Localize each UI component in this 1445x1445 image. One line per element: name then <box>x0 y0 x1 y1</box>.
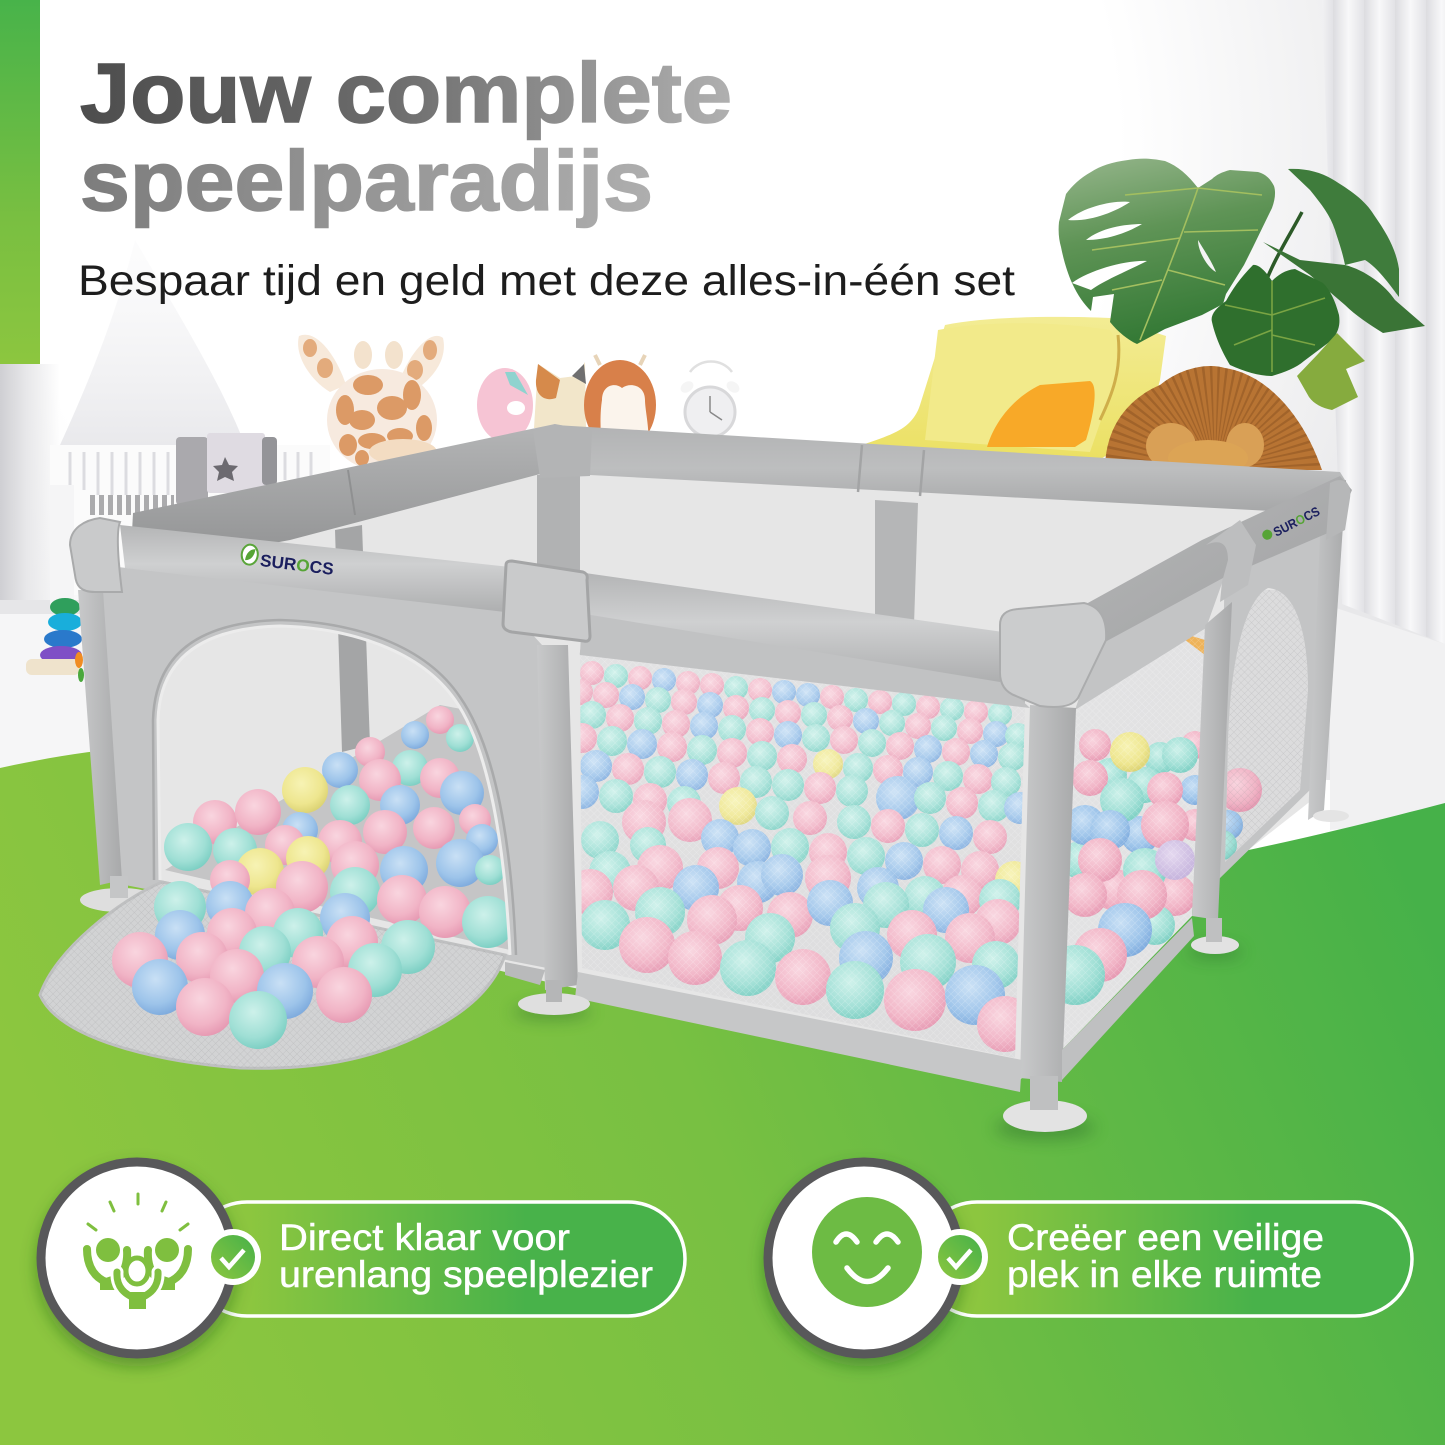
pill text: plek in elke ruimte <box>1007 1254 1322 1295</box>
crib <box>50 445 330 605</box>
pill text <box>279 1217 653 1295</box>
playpen <box>40 424 1352 1140</box>
icon: family <box>87 1194 188 1309</box>
logo left <box>240 544 335 579</box>
left side rail <box>130 424 555 570</box>
room background <box>0 0 1445 830</box>
curtain <box>1322 0 1445 644</box>
front top rails <box>120 525 1003 682</box>
door flap mat <box>40 882 505 1068</box>
plush unicorn <box>477 368 533 442</box>
plush cat <box>534 362 586 428</box>
corner sleeve front <box>1000 603 1106 707</box>
yellow chair <box>862 317 1166 462</box>
upper front fabric strip <box>580 612 1030 708</box>
alarm clock <box>678 362 742 437</box>
canopy <box>60 240 245 445</box>
pill text: urenlang speelplezier <box>279 1254 653 1295</box>
circle <box>41 1162 233 1354</box>
subtitle: Bespaar tijd en geld met deze alles-in-één set <box>78 257 1015 305</box>
pill text: Direct klaar voor <box>279 1217 570 1258</box>
mesh panel: front with balls <box>580 661 1024 1058</box>
stacking rings toy <box>26 598 84 682</box>
foot far right <box>1313 810 1349 822</box>
back corner <box>533 424 592 478</box>
title: speelparadijs <box>80 134 653 228</box>
upper right fabric strip <box>1075 572 1226 710</box>
benefit badge: play <box>41 1162 685 1354</box>
orange pillow <box>987 381 1095 447</box>
pill text: Creëer een veilige <box>1007 1217 1324 1258</box>
green corner tab <box>0 0 40 364</box>
mesh panel: right with balls <box>1063 636 1204 1049</box>
circle <box>768 1162 960 1354</box>
right far post <box>1308 480 1346 820</box>
right side rail <box>1086 476 1352 642</box>
giraffe plush <box>298 335 444 471</box>
pill <box>920 1202 1412 1316</box>
title <box>80 46 732 228</box>
middle sleeve <box>503 561 590 641</box>
left fabric panel with door <box>100 565 547 968</box>
icon: smiley <box>812 1197 922 1307</box>
plush deer <box>584 355 656 450</box>
blankets <box>176 433 277 505</box>
bottom rails <box>505 918 1194 1092</box>
green swoosh background <box>0 745 1445 1445</box>
logo right: SUROCS <box>1271 503 1322 540</box>
pen shadows <box>512 945 1243 1140</box>
lion plush <box>1106 366 1322 470</box>
side fabric panel right <box>1218 490 1330 880</box>
ball pool behind door <box>164 706 514 948</box>
back posts <box>335 475 918 752</box>
icon: check <box>932 1229 988 1285</box>
corner sleeve left <box>70 518 122 592</box>
right side rear balls <box>1225 590 1308 862</box>
pen interior <box>90 470 1340 1080</box>
balls on mat <box>112 881 435 1049</box>
logo left: SUROCS <box>259 551 335 579</box>
benefit badge: safe <box>768 1162 1412 1354</box>
logo right <box>1260 503 1322 545</box>
title: Jouw complete <box>80 46 732 140</box>
back rail <box>555 425 1350 512</box>
posts front <box>78 590 1232 1082</box>
pill text <box>1007 1217 1324 1295</box>
plant: monstera <box>1059 159 1425 410</box>
icon: check <box>205 1229 261 1285</box>
mesh top band front <box>580 652 1025 702</box>
feet <box>80 876 1239 1132</box>
pill <box>190 1202 685 1316</box>
